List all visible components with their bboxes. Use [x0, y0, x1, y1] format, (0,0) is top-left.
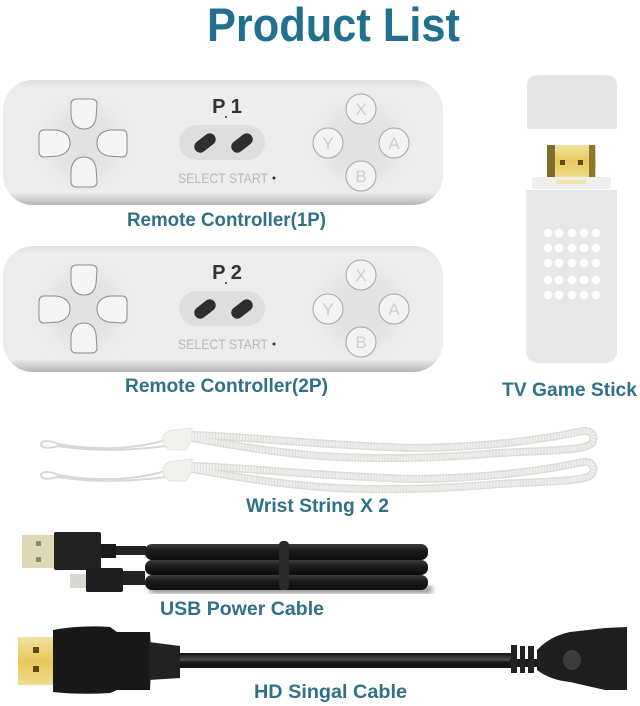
label: remote controller 2P: Remote Controller(2P)	[125, 376, 328, 397]
controller 2P	[3, 246, 443, 372]
controller 2P: P 2	[212, 262, 242, 284]
label: wrist string: Wrist String X 2	[246, 496, 389, 517]
TV game stick	[526, 75, 617, 363]
wrist string 2	[41, 459, 593, 489]
HD signal cable	[18, 626, 627, 694]
USB power cable	[22, 532, 432, 593]
wrist string 1	[41, 428, 593, 458]
label: remote controller 1P: Remote Controller(1P)	[127, 210, 326, 231]
label: USB power cable: USB Power Cable	[160, 599, 324, 620]
label: TV game stick: TV Game Stick	[502, 380, 637, 401]
label: HD signal cable: HD Singal Cable	[254, 682, 407, 703]
controller 1P	[3, 80, 443, 205]
wrist strings	[41, 428, 593, 489]
controller 1P: P 1	[212, 96, 242, 118]
